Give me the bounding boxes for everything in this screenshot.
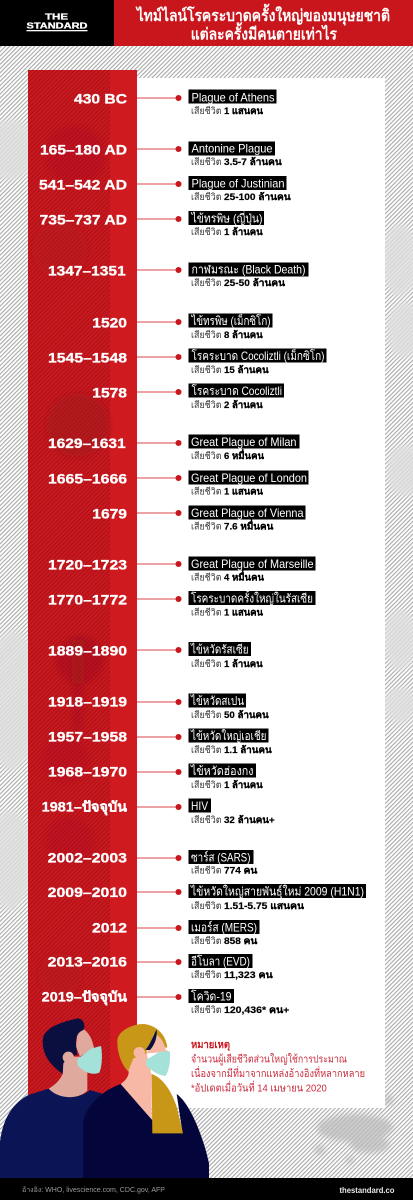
timeline row: 2002-2003 xyxy=(48,850,258,876)
timeline row: 1665-1666: เสียชีวิต xyxy=(191,486,222,498)
timeline row: 165-180 AD: เสียชีวิต xyxy=(191,156,222,168)
timeline row: 1679: เสียชีวิต xyxy=(191,520,222,532)
timeline row: 1889-1890 xyxy=(48,642,263,670)
timeline row: 1889-1890: ไข้หวัดรัสเซีย xyxy=(190,642,248,656)
timeline row: 430 BC xyxy=(74,90,276,117)
timeline row: 1981-present: 1981–ปัจจุบัน xyxy=(42,798,127,816)
timeline row: 1347-1351: กาฬมรณะ (Black Death) xyxy=(192,262,306,276)
timeline row: 430 BC: Plague of Athens xyxy=(192,90,274,104)
timeline row: 2019-present: 120,436* คน+ xyxy=(224,1005,290,1016)
timeline row: 1968-1970: เสียชีวิต xyxy=(191,779,222,791)
timeline row: 1545-1548: โรคระบาด Cocoliztli (เม็กซิโก) xyxy=(192,348,324,363)
header: logo block xyxy=(0,0,114,46)
timeline row: 1981-present: เสียชีวิต xyxy=(191,814,222,826)
timeline row: 2009-2010: 2009–2010 xyxy=(48,884,127,900)
footer: อ้างอิง: WHO, livescience.com, CDC.gov, AFP xyxy=(22,1186,165,1194)
timeline row: 541-542 AD xyxy=(39,176,291,203)
timeline row: 1578: 2 ล้านคน xyxy=(224,399,263,411)
timeline row: 430 BC: เสียชีวิต xyxy=(191,105,222,117)
footer xyxy=(0,1178,413,1200)
timeline row: 2002-2003: เสียชีวิต xyxy=(191,864,222,876)
timeline row: 1347-1351 xyxy=(48,262,308,289)
timeline row: 2002-2003: ซาร์ส (SARS) xyxy=(191,850,251,864)
man xyxy=(0,1018,107,1178)
header: logo block: STANDARD xyxy=(26,20,88,30)
timeline row: 1629-1631: เสียชีวิต xyxy=(191,450,222,462)
timeline row: 165-180 AD: Antonine Plague xyxy=(192,142,273,156)
timeline row: 1770-1772: 1 แสนคน xyxy=(224,608,264,618)
timeline row: 1545-1548: เสียชีวิต xyxy=(191,364,222,376)
woman xyxy=(83,1024,209,1178)
timeline row: 2009-2010: 1.51-5.75 แสนคน xyxy=(224,901,305,912)
timeline row: 541-542 AD: เสียชีวิต xyxy=(191,191,222,203)
timeline row: 1720-1723: Great Plague of Marseille xyxy=(191,557,314,571)
timeline row: 1520: ไข้ทรพิษ (เม็กซิโก) xyxy=(191,313,271,328)
timeline row: 1578: 1578 xyxy=(92,384,127,400)
note xyxy=(191,1039,365,1094)
note: หมายเหตุ xyxy=(191,1039,230,1052)
timeline row: 735-737 AD: เสียชีวิต xyxy=(191,226,222,238)
timeline row: 1918-1919: 1918–1919 xyxy=(48,694,127,710)
timeline row: 1968-1970: 1 ล้านคน xyxy=(224,779,263,791)
timeline row: 1981-present: HIV xyxy=(191,799,208,813)
timeline row: 1520: 1520 xyxy=(92,314,127,330)
note: จำนวนผู้เสียชีวิตส่วนใหญ่ใช้การประมาณ xyxy=(191,1052,347,1066)
timeline row: 1720-1723: 1720–1723 xyxy=(48,556,127,572)
header: logo block: THE xyxy=(45,12,69,22)
timeline row: 1981-present xyxy=(42,798,275,826)
timeline row: 541-542 AD: 25-100 ล้านคน xyxy=(224,191,291,203)
red timeline bar xyxy=(28,70,137,1110)
timeline row: 541-542 AD: Plague of Justinian xyxy=(192,176,284,190)
footer: thestandard.co xyxy=(340,1185,394,1195)
timeline row: 165-180 AD: 3.5-7 ล้านคน xyxy=(224,156,282,168)
timeline row: 1720-1723: เสียชีวิต xyxy=(191,572,222,584)
timeline row: 2019-present: เสียชีวิต xyxy=(191,1004,222,1016)
timeline row: 2012 xyxy=(92,920,260,947)
timeline row: 2019-present: 2019–ปัจจุบัน xyxy=(42,988,127,1006)
timeline row: 1545-1548: 15 ล้านคน xyxy=(224,364,269,376)
timeline row: 2009-2010: เสียชีวิต xyxy=(191,900,222,912)
timeline row: 1968-1970: ไข้หวัดฮ่องกง xyxy=(190,764,254,778)
timeline row: 1918-1919: เสียชีวิต xyxy=(191,709,222,721)
timeline row: 1720-1723 xyxy=(48,556,316,584)
timeline row: 1770-1772: โรคระบาดครั้งใหญ่ในรัสเซีย xyxy=(191,590,313,606)
timeline row: 165-180 AD xyxy=(40,142,282,168)
timeline row: 165-180 AD: 165–180 AD xyxy=(40,142,127,158)
timeline row: 1629-1631: 6 หมื่นคน xyxy=(224,448,265,462)
timeline row: 1347-1351: 1347–1351 xyxy=(48,262,126,278)
timeline row: 1968-1970 xyxy=(48,764,263,791)
timeline row: 1957-1958: เสียชีวิต xyxy=(191,744,222,756)
timeline row: 2013-2016: เสียชีวิต xyxy=(191,969,222,981)
timeline row: 1918-1919: ไข้หวัดสเปน xyxy=(190,694,244,708)
timeline row: 1578 xyxy=(92,384,284,411)
timeline row: 1720-1723: 4 หมื่นคน xyxy=(224,570,265,584)
timeline row: 430 BC: 430 BC xyxy=(74,90,127,106)
timeline row: 1770-1772: เสียชีวิต xyxy=(191,606,222,618)
timeline row: 1578: เสียชีวิต xyxy=(191,399,222,411)
timeline row: 1665-1666: 1 แสนคน xyxy=(224,486,264,498)
timeline row: 2009-2010: ไข้หวัดใหญ่สายพันธุ์ใหม่ 2009 (H1N1) xyxy=(190,884,364,900)
timeline row: 2002-2003: 774 คน xyxy=(224,866,258,876)
timeline row: 1679: 1679 xyxy=(92,506,127,522)
timeline row: 735-737 AD: ไข้ทรพิษ (ญี่ปุ่น) xyxy=(191,210,262,226)
timeline row: 2013-2016 xyxy=(48,954,273,981)
timeline row: 1957-1958: 1957–1958 xyxy=(48,728,127,744)
timeline row: 1665-1666 xyxy=(48,470,308,498)
timeline row: 2002-2003: 2002–2003 xyxy=(48,850,127,866)
timeline row: 2019-present xyxy=(42,988,290,1016)
timeline row: 2009-2010 xyxy=(48,884,366,912)
illustration: two people wearing masks xyxy=(0,1018,209,1178)
header: title xyxy=(114,0,413,46)
timeline row: 1918-1919 xyxy=(48,694,269,721)
timeline row: 1770-1772 xyxy=(48,590,316,618)
timeline row: 2012: 2012 xyxy=(92,920,127,936)
timeline row: 1347-1351: 25-50 ล้านคน xyxy=(224,277,286,289)
timeline row: 1968-1970: 1968–1970 xyxy=(48,764,127,780)
timeline row: 735-737 AD xyxy=(40,210,264,238)
timeline row: 2012: เสียชีวิต xyxy=(191,935,222,947)
timeline row: 735-737 AD: 735–737 AD xyxy=(40,212,127,228)
timeline row: 1629-1631 xyxy=(48,434,300,462)
timeline row: 2012: เมอร์ส (MERS) xyxy=(191,920,257,934)
timeline row: 1770-1772: 1770–1772 xyxy=(48,592,127,608)
timeline row: 1679: 7.6 หมื่นคน xyxy=(224,518,274,532)
note: *อัปเดตเมื่อวันที่ 14 เมษายน 2020 xyxy=(191,1080,327,1094)
timeline row: 735-737 AD: 1 ล้านคน xyxy=(224,226,263,238)
timeline row: 541-542 AD: 541–542 AD xyxy=(39,176,127,192)
timeline row: 2013-2016: อีโบลา (EVD) xyxy=(191,954,250,968)
note: เนื่องจากมีที่มาจากแหล่งอ้างอิงที่หลากหลาย xyxy=(191,1066,365,1080)
timeline row: 1545-1548: 1545–1548 xyxy=(48,350,127,366)
header: title: แต่ละครั้งมีคนตายเท่าไร xyxy=(191,22,337,44)
timeline row: 1629-1631: Great Plague of Milan xyxy=(191,435,296,449)
timeline row: 1957-1958: 1.1 ล้านคน xyxy=(224,744,272,756)
timeline row: 1679 xyxy=(92,506,306,532)
timeline row: 1918-1919: 50 ล้านคน xyxy=(224,709,269,721)
timeline row: 430 BC: 1 แสนคน xyxy=(224,106,264,117)
timeline row: 1665-1666: 1665–1666 xyxy=(48,470,127,486)
timeline row: 1679: Great Plague of Vienna xyxy=(191,506,304,520)
timeline row: 1520: 8 ล้านคน xyxy=(224,329,263,341)
timeline row: 1889-1890: เสียชีวิต xyxy=(191,658,222,670)
timeline row: 1665-1666: Great Plague of London xyxy=(191,471,307,485)
timeline row: 2012: 858 คน xyxy=(224,936,258,947)
timeline row: 1889-1890: 1 ล้านคน xyxy=(224,658,263,670)
timeline row: 1889-1890: 1889–1890 xyxy=(48,642,127,658)
white content panel xyxy=(137,78,385,1108)
timeline row: 1578: โรคระบาด Cocoliztli xyxy=(192,384,282,398)
timeline row: 1347-1351: เสียชีวิต xyxy=(191,277,222,289)
timeline row: 1545-1548 xyxy=(48,348,326,376)
timeline row: 2019-present: โควิด-19 xyxy=(191,990,232,1004)
timeline row: 1520 xyxy=(92,313,272,341)
timeline row: 1957-1958 xyxy=(48,728,272,756)
timeline row: 2013-2016: 11,323 คน xyxy=(224,970,273,981)
timeline row: 2013-2016: 2013–2016 xyxy=(48,954,127,970)
timeline row: 1520: เสียชีวิต xyxy=(191,329,222,341)
timeline row: 1981-present: 32 ล้านคน+ xyxy=(224,814,275,826)
timeline row: 1957-1958: ไข้หวัดใหญ่เอเชีย xyxy=(190,729,266,743)
timeline row: 1629-1631: 1629–1631 xyxy=(48,435,126,451)
